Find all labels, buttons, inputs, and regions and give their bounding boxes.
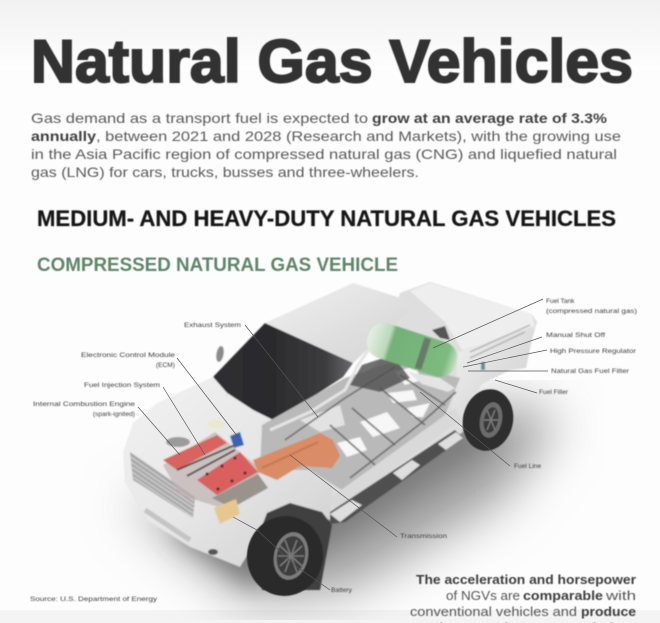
part labels: Fuel Line xyxy=(514,463,541,470)
grille xyxy=(130,452,195,518)
callout: acceleration and horsepower: comparable xyxy=(523,588,603,603)
title: Natural Gas Vehicles xyxy=(31,28,633,95)
engine rear valve cover xyxy=(163,435,227,470)
front wheel xyxy=(241,510,329,602)
callout: acceleration and horsepower: with xyxy=(605,588,636,603)
engine front valve cover xyxy=(197,452,258,495)
part labels: Battery xyxy=(331,587,353,594)
part labels: Internal Combustion Engine xyxy=(33,401,135,408)
callout: acceleration and horsepower: of NGVs are xyxy=(446,588,520,603)
hood xyxy=(123,377,335,567)
intro text block: in the Asia Pacific region of compressed natural gas (CNG) and liquefied natural xyxy=(31,146,617,162)
part labels: Transmission xyxy=(400,533,447,540)
callout: acceleration and horsepower: The acceleration and horsepower xyxy=(416,572,636,587)
ECM xyxy=(230,432,244,448)
battery xyxy=(214,499,240,524)
engine bay shadow xyxy=(163,432,262,508)
part labels: Fuel Filler xyxy=(539,389,569,396)
ground shadow xyxy=(125,400,560,600)
sill xyxy=(330,408,462,510)
windshield xyxy=(213,323,353,420)
running board xyxy=(330,430,463,524)
hoses near tank xyxy=(350,355,410,392)
bed and side xyxy=(300,282,537,520)
engine lower block xyxy=(212,474,268,508)
part labels: Fuel Injection System xyxy=(84,382,161,389)
tank cradle xyxy=(408,372,455,392)
intro text block: gas (LNG) for cars, trucks, busses and three-wheelers. xyxy=(31,164,419,180)
intro text block: Gas demand as a transport fuel is expected to xyxy=(31,110,368,126)
part labels: Exhaust System xyxy=(184,322,242,329)
part labels xyxy=(30,298,637,603)
roof xyxy=(265,283,417,363)
part labels: Source: U.S. Department of Energy xyxy=(30,596,158,603)
callout: acceleration and horsepower xyxy=(410,572,637,623)
part labels: (compressed natural gas) xyxy=(546,308,637,315)
chassis floor xyxy=(260,362,460,492)
chassis rails xyxy=(285,367,456,478)
fuel tank xyxy=(363,319,461,381)
coolant reservoir xyxy=(207,420,225,428)
part labels: Fuel Tank xyxy=(546,298,575,305)
intro text block: annually xyxy=(31,128,96,144)
intro text block: , between 2021 and 2028 (Research and Markets), with the growing use xyxy=(96,128,621,144)
dark under-shadow xyxy=(170,420,500,585)
part labels: Electronic Control Module xyxy=(81,352,175,359)
part labels: (ECM) xyxy=(156,362,175,369)
wheel arch xyxy=(257,503,332,590)
callout: acceleration and horsepower: conventional vehicles and xyxy=(410,604,577,619)
mirror xyxy=(215,346,225,362)
rear wheel xyxy=(457,384,519,456)
subheading: compressed natural gas vehicle: COMPRESSED NATURAL GAS VEHICLE xyxy=(37,255,398,276)
part labels: (spark-ignited) xyxy=(93,411,135,418)
intro text block xyxy=(31,110,621,180)
truck cutaway illustration xyxy=(123,282,560,602)
part labels: High Pressure Regulator xyxy=(550,348,637,355)
callout: acceleration and horsepower: produce xyxy=(581,604,636,619)
truck body xyxy=(123,282,537,590)
leader lines xyxy=(138,299,548,590)
transmission xyxy=(253,433,340,480)
part labels: Natural Gas Fuel Filter xyxy=(551,368,630,375)
part labels: Manual Shut Off xyxy=(546,332,605,339)
floor highlights xyxy=(300,366,430,457)
fuel system squiggle xyxy=(470,325,530,358)
intro text block: grow at an average rate of 3.3% xyxy=(372,110,608,126)
bumper shade xyxy=(145,510,190,540)
heading: medium- and heavy-duty: MEDIUM- AND HEAVY-DUTY NATURAL GAS VEHICLES xyxy=(37,206,616,231)
